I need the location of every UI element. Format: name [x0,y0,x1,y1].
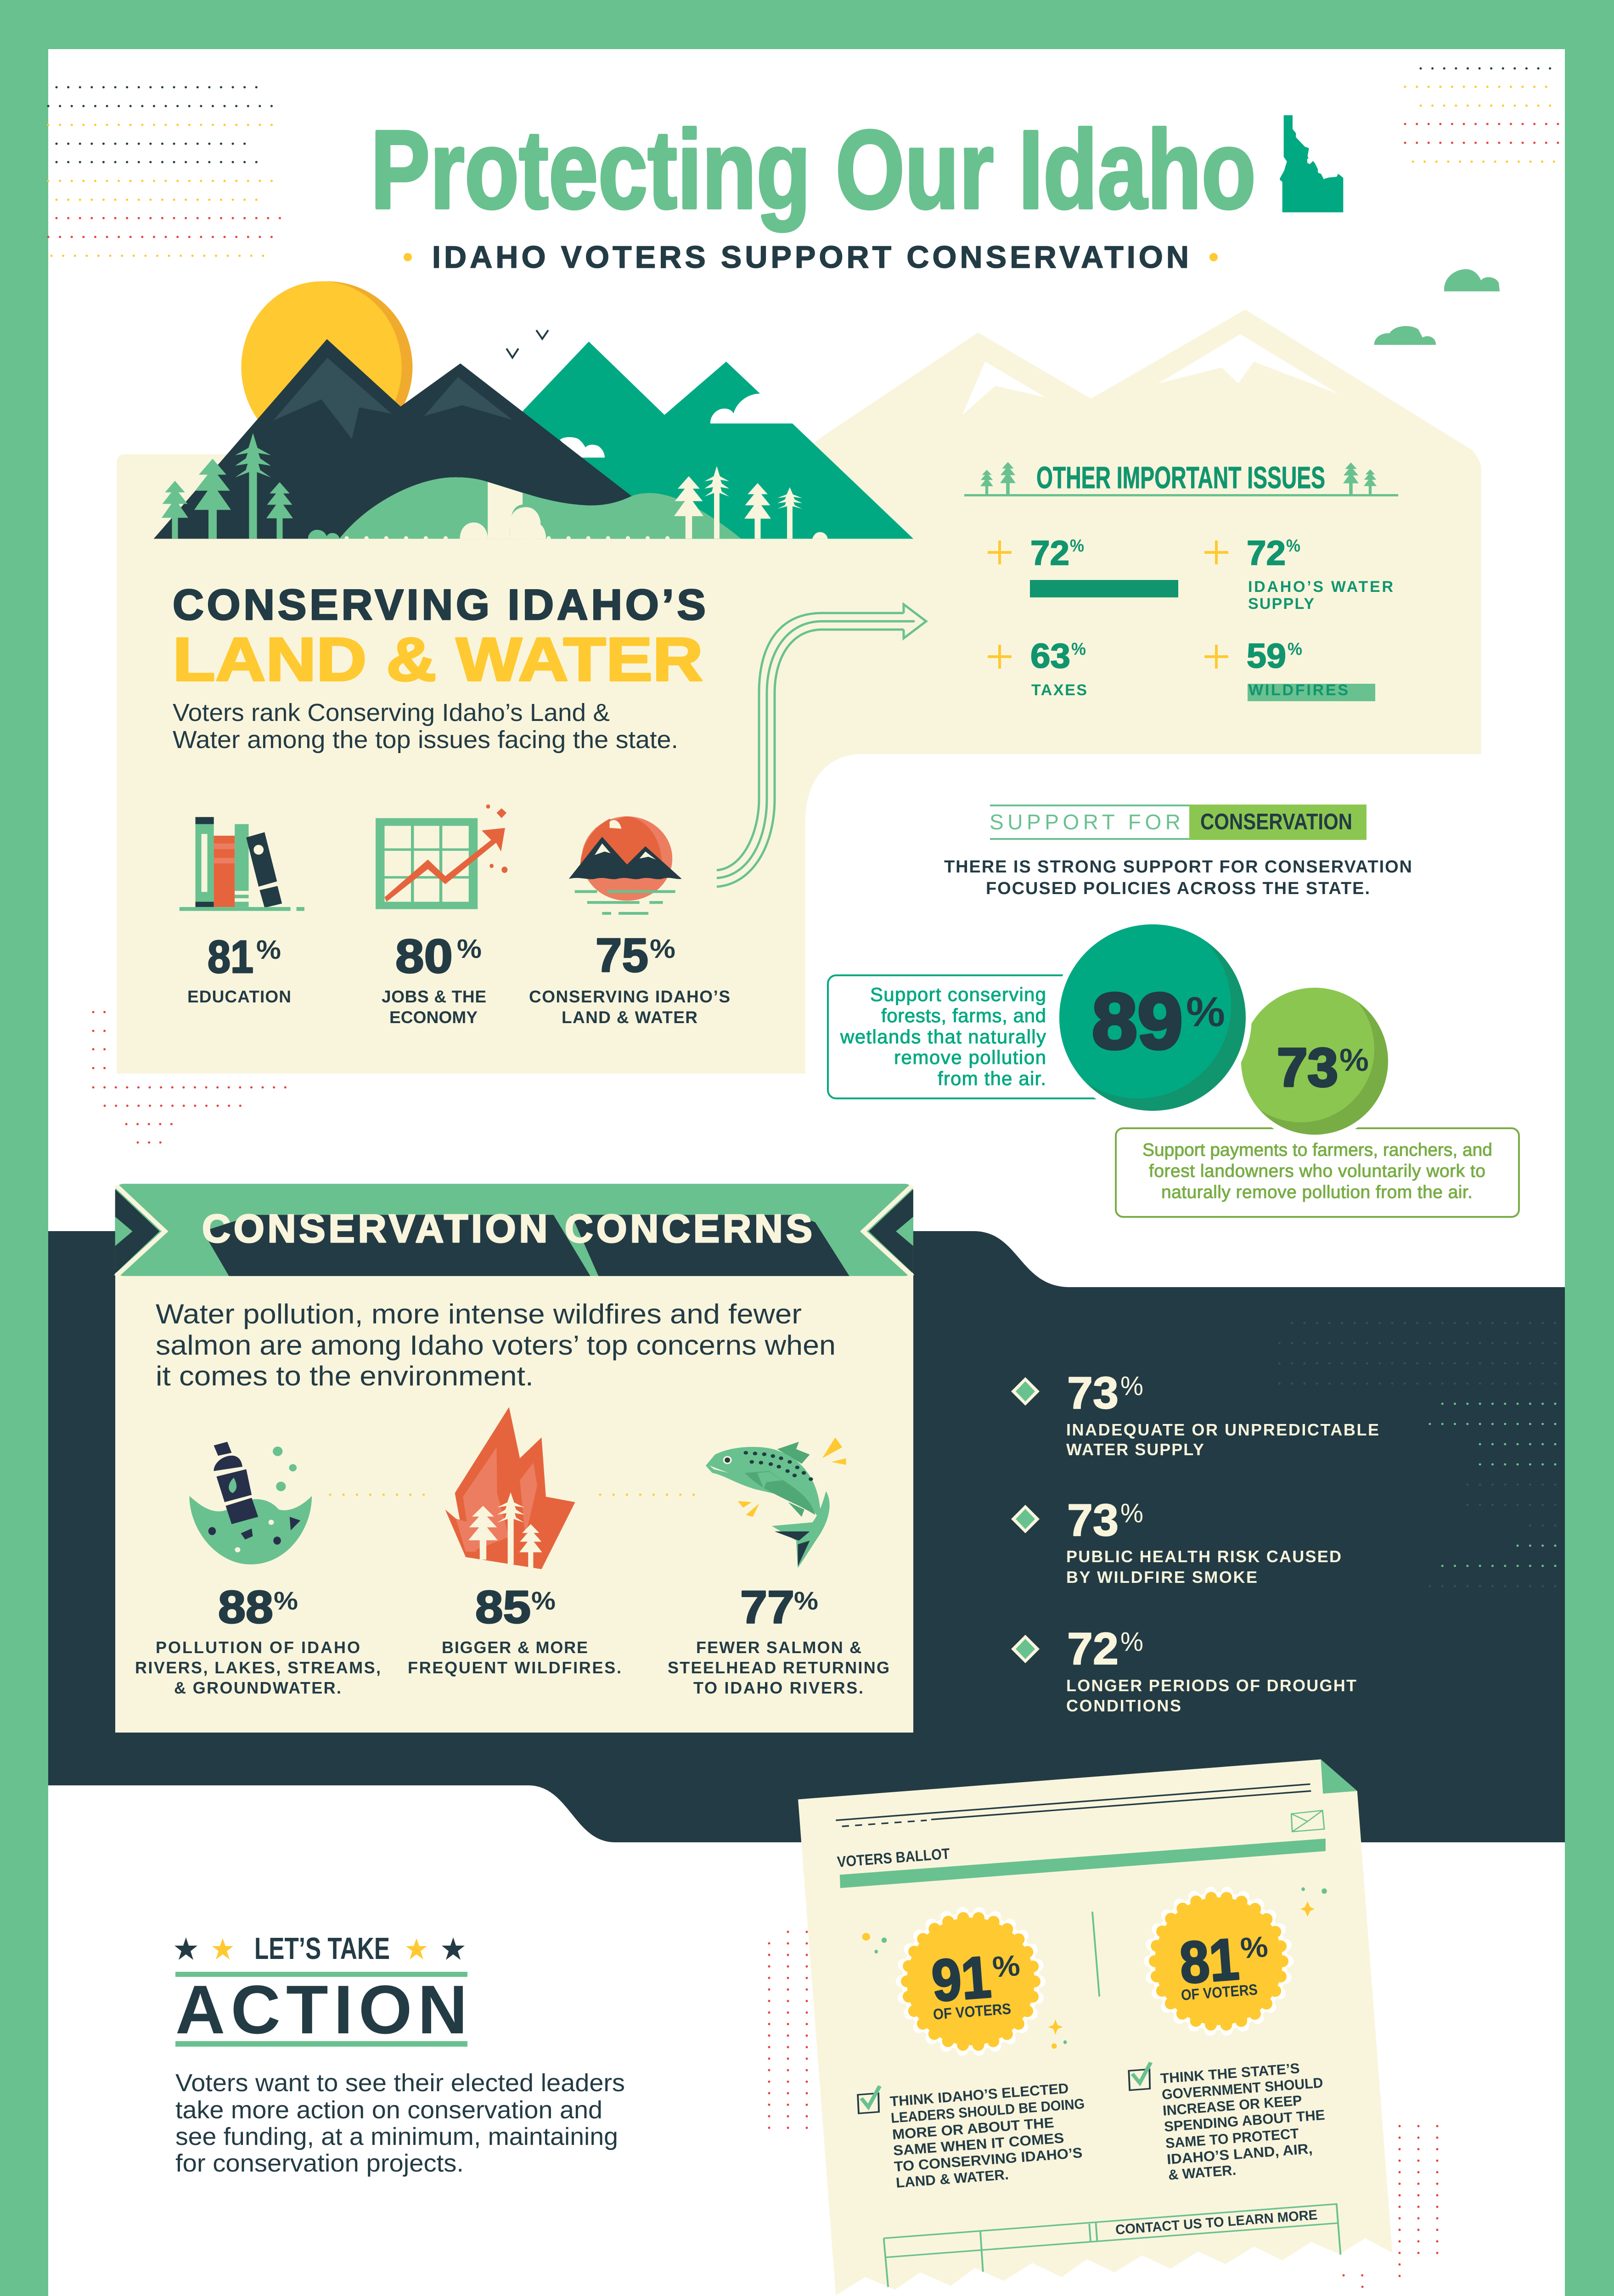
decorative dots: dark band [1267,1323,1555,1586]
heading: OTHER IMPORTANT ISSUES [1036,461,1325,495]
sun [242,281,412,453]
badge: 91 percent: 91 [929,1944,993,2014]
heading badge [990,805,1367,840]
callout: 89 percent: Support conserving [870,984,1046,1005]
heading: LAND & WATER [173,625,703,694]
body text: Voters want to see their elected leaders [175,2069,625,2097]
body text: take more action on conservation and [175,2096,602,2124]
icon: books [180,817,304,911]
heading bars and action: ACTION [175,1971,467,2048]
stat: 80% jobs: 80 [395,930,453,983]
stat: 59% wildfires: % [1288,640,1302,659]
stat: 85% wildfires [408,1581,621,1677]
body text [175,2069,625,2177]
circle: 89 percent: % [1186,989,1225,1035]
stat: 59% wildfires [1247,636,1375,701]
stat: 88% pollution: 88 [218,1581,273,1633]
stat: 72% water supply: IDAHO’S WATER [1248,578,1393,596]
stat: 81% education: 81 [208,931,253,983]
stat list: 73% water supply [1011,1367,1379,1459]
panel: voters ballot [798,1759,1392,2296]
stat list: 73% wildfire smoke [1011,1495,1341,1587]
decorative dots: lower left of land panel [93,1012,289,1142]
panel: cream mountains and land background [117,310,1481,1074]
ballot text: state government: & WATER. [1168,2162,1237,2183]
stat: 88% pollution: % [274,1586,298,1615]
decorative dots: around ballot [769,1932,1437,2287]
heading: CONSERVING IDAHO’S [173,580,706,629]
stat: 85% wildfires: BIGGER & MORE [442,1638,588,1657]
ballot text: elected leaders [889,2080,1085,2191]
stat list: 72% drought: CONDITIONS [1066,1696,1181,1715]
ballot heading: VOTERS BALLOT [837,1845,950,1870]
intro text: Water pollution, more intense wildfires and fewer [156,1299,802,1329]
callout: 89 percent [828,975,1113,1098]
callout: 89 percent: wetlands that naturally [840,1026,1046,1047]
badge: 81 percent [1150,1892,1288,2030]
badge: 81 percent: OF VOTERS [1181,1981,1258,2003]
stat: 63% taxes: TAXES [1031,681,1087,699]
ballot text: state government: SAME TO PROTECT [1165,2125,1299,2151]
ribbon heading: CONSERVATION CONCERNS [202,1207,812,1251]
intro text: Voters rank Conserving Idaho’s Land & [173,699,610,726]
icon: polluted water [189,1442,312,1564]
stat: 72% bar [1030,534,1178,597]
stat: 77% salmon: FEWER SALMON & [696,1638,861,1657]
intro text: it comes to the environment. [156,1361,534,1391]
icon: salmon [706,1437,846,1568]
stat: 77% salmon: TO IDAHO RIVERS. [693,1678,863,1697]
stat: 85% wildfires: FREQUENT WILDFIRES. [408,1658,621,1677]
plus signs [988,540,1228,669]
stat: 88% pollution: & GROUNDWATER. [174,1678,341,1697]
stat: 75% land and water: 75 [596,929,648,982]
ballot text: state government: INCREASE OR KEEP [1162,2092,1303,2119]
ballot text: state government: GOVERNMENT SHOULD [1161,2075,1324,2103]
callout: 73 percent: Support payments to farmers, ranchers, and [1142,1140,1492,1160]
stat: 72% water supply: SUPPLY [1248,595,1314,613]
ballot text: elected leaders: THINK IDAHO’S ELECTED [889,2080,1069,2110]
callout: 73 percent: forest landowners who voluntarily work to [1149,1161,1485,1181]
stat list: 72% drought [1011,1623,1356,1715]
stat list: 72% drought: 72 [1067,1623,1119,1674]
stat: 88% pollution [135,1581,381,1697]
arrow: triple line to other issues [717,604,926,887]
decorative dots: top left [48,87,280,256]
subtitle: IDAHO VOTERS SUPPORT CONSERVATION [432,240,1189,275]
stat: 63% taxes [1030,636,1087,699]
stat: 75% land and water: CONSERVING IDAHO’S [529,987,730,1006]
stat: 63% taxes: 63 [1030,636,1070,675]
heading badge: SUPPORT FOR [990,810,1181,834]
body text: see funding, at a minimum, maintaining [175,2123,618,2150]
ribbon heading [115,1184,913,1276]
stat: 85% wildfires: 85 [475,1581,531,1633]
stat: 72% bar: 72 [1030,534,1069,572]
ballot text: state government: THINK THE STATE’S [1160,2060,1300,2087]
stat list: 73% water supply: % [1120,1371,1143,1401]
callout: 73 percent [1116,1128,1519,1217]
ballot text: elected leaders: LEADERS SHOULD BE DOING [890,2095,1085,2126]
stat: 80% jobs: ECONOMY [389,1008,478,1027]
intro text [173,699,678,754]
stat: 72% water supply: % [1286,536,1300,556]
icons: clouds [1374,269,1500,345]
stat: 88% pollution: POLLUTION OF IDAHO [156,1638,360,1657]
stat: 81% education [187,931,291,1006]
stat: 81% education: % [256,935,281,965]
callout: 73 percent: naturally remove pollution from the air. [1161,1182,1473,1202]
intro text: Water among the top issues facing the state. [173,726,678,754]
card background [115,1240,913,1733]
stat: 59% wildfires: WILDFIRES [1248,681,1348,699]
icons: birds [506,330,548,358]
panel: let's take action [174,1931,625,2177]
badge: 81 percent: % [1239,1930,1269,1965]
circle: 89 percent: 89 [1092,977,1183,1065]
stat list: 73% wildfire smoke: % [1120,1498,1143,1528]
badge: 91 percent: % [991,1949,1021,1984]
icon: growth chart [376,805,507,909]
stat: 72% water supply: 72 [1247,534,1286,572]
illustration: mountains [154,339,913,539]
decorative dots: top right [1405,68,1565,162]
ground scallops [347,536,684,540]
intro text: salmon are among Idaho voters’ top concerns when [156,1330,836,1361]
stat list: 72% drought: % [1120,1627,1143,1657]
stat: 88% pollution: RIVERS, LAKES, STREAMS, [135,1658,381,1677]
stat: 72% water supply [1247,534,1393,613]
circle: 89 percent [1059,924,1252,1111]
ballot text: contact us: CONTACT US TO LEARN MORE [1115,2207,1318,2238]
circle: 73 percent: 73 [1277,1037,1338,1098]
description [944,857,1412,898]
stat list: 73% wildfire smoke: BY WILDFIRE SMOKE [1066,1568,1257,1587]
stat: 75% land and water: LAND & WATER [562,1008,697,1027]
panel: support for conservation [828,805,1519,1217]
stat: 77% salmon [668,1581,889,1697]
stat: 72% bar: % [1070,536,1084,556]
ballot text: elected leaders: LAND & WATER. [895,2167,1009,2191]
stat: 80% jobs: JOBS & THE [382,987,486,1006]
icons: cream trees [674,466,802,539]
heading [173,580,706,694]
stat list: 73% water supply: INADEQUATE OR UNPREDICTABLE [1066,1420,1379,1439]
badge: 91 percent [902,1913,1040,2050]
icon: stars [174,1937,465,1960]
intro text [156,1299,836,1391]
ballot text: state government: IDAHO’S LAND, AIR, [1166,2140,1313,2167]
body text: for conservation projects. [175,2150,464,2177]
stat: 59% wildfires: 59 [1247,636,1286,675]
stat list: 73% water supply: 73 [1067,1367,1119,1418]
stat: 63% taxes: % [1071,640,1086,659]
description: FOCUSED POLICIES ACROSS THE STATE. [986,879,1370,898]
ballot text: elected leaders: MORE OR ABOUT THE [892,2115,1055,2143]
stat list: 73% wildfire smoke: 73 [1067,1495,1119,1545]
heading: LET’S TAKE [254,1931,390,1966]
panel: conserving land and water [173,580,730,1027]
stat: 77% salmon: STEELHEAD RETURNING [668,1658,889,1677]
back mountain snow caps [962,334,1338,415]
callout: 89 percent: remove pollution [894,1047,1046,1068]
icon: Idaho state map [1280,115,1343,212]
stat: 77% salmon: 77 [740,1581,794,1633]
stat: 77% salmon: % [794,1586,818,1615]
callout: 89 percent: from the air. [938,1068,1046,1089]
ballot text: elected leaders: TO CONSERVING IDAHO’S [894,2144,1083,2175]
icon: mountains and sun [569,816,682,915]
description: THERE IS STRONG SUPPORT FOR CONSERVATION [944,857,1412,877]
ballot text: state government [1160,2060,1326,2183]
icons: green trees [162,433,293,539]
icon: wildfire [445,1407,575,1569]
panel: conservation concerns [115,1184,913,1733]
heading badge: CONSERVATION [1200,810,1352,834]
ballot text: elected leaders: SAME WHEN IT COMES [893,2130,1064,2159]
badge: 81 percent: 81 [1177,1926,1241,1996]
badge: 91 percent: OF VOTERS [933,2000,1012,2023]
stat: 80% jobs: % [457,934,482,964]
stat: 75% land and water: % [650,934,675,964]
circle: 73 percent: % [1339,1042,1369,1078]
stat: 80% jobs [382,930,486,1027]
stat list: 72% drought: LONGER PERIODS OF DROUGHT [1066,1676,1356,1695]
panel: other important issues [964,461,1398,701]
ballot text: state government: SPENDING ABOUT THE [1164,2107,1326,2135]
stat list: 73% wildfire smoke: PUBLIC HEALTH RISK CAUSED [1066,1547,1341,1566]
callout: 89 percent: forests, farms, and [881,1005,1046,1026]
stat: 81% education: EDUCATION [187,987,291,1006]
background band: dark navy [48,1231,1565,1842]
stat: 75% land and water [529,929,730,1027]
circle: 73 percent [1241,988,1388,1135]
stat: 85% wildfires: % [531,1586,556,1615]
dotted connectors [330,1493,696,1496]
ballot paper [798,1759,1392,2296]
title: Protecting Our Idaho [371,107,1256,232]
stat list: 73% water supply: WATER SUPPLY [1066,1440,1204,1459]
